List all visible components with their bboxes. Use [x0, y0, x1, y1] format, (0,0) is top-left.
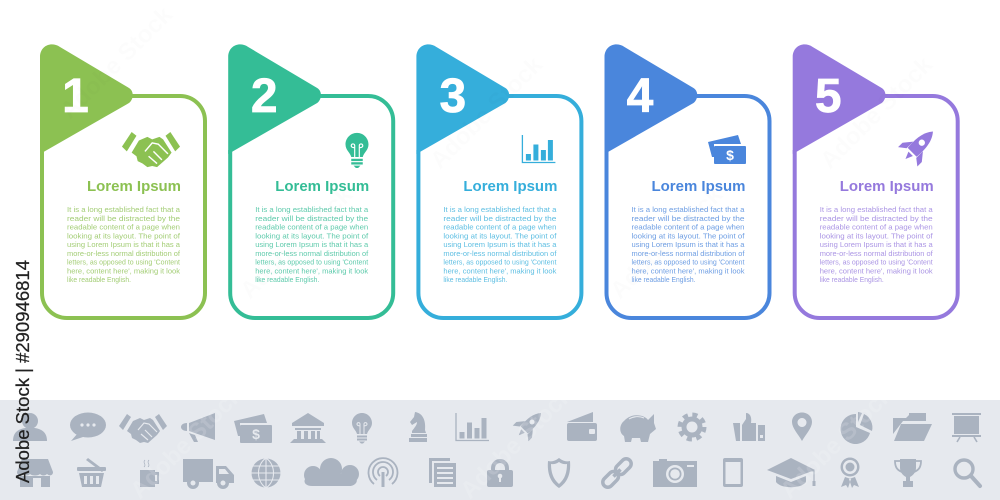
body text 3: here, content here', making it look — [443, 266, 557, 275]
body text 2: using Lorem Ipsum is that it has a — [255, 240, 369, 249]
body text 2: like readable English. — [255, 275, 319, 284]
icon: banknotes — [708, 135, 746, 164]
card outline 5 — [795, 96, 958, 318]
body text 1: here, content here', making it look — [67, 266, 180, 275]
body text 4: here, content here', making it look — [632, 266, 745, 275]
icon: person — [13, 413, 47, 441]
triangle badge 2 — [228, 44, 321, 154]
icon: banknotes — [234, 414, 272, 443]
body text 3: It is a long established fact that a — [443, 205, 557, 214]
body text 1: looking at its layout. The point of — [67, 231, 181, 240]
watermark: Adobe Stock — [235, 181, 358, 304]
icon: bank — [290, 413, 326, 443]
icon: megaphone — [181, 413, 215, 442]
body text 2 — [255, 205, 369, 284]
number 4: 4 — [627, 70, 654, 123]
body text 5: letters, as opposed to using 'Content — [820, 258, 933, 266]
icon: coffee cup — [140, 460, 159, 487]
watermark: Adobe Stock — [815, 51, 938, 174]
body text 3: looking at its layout. The point of — [443, 231, 557, 240]
body text 1: letters, as opposed to using 'Content — [67, 258, 180, 266]
card outline 2 — [230, 96, 393, 318]
body text 5: looking at its layout. The point of — [820, 231, 934, 240]
body text 4: It is a long established fact that a — [632, 205, 745, 214]
icon: documents — [429, 458, 456, 487]
number 1: 1 — [62, 70, 89, 123]
number 5: 5 — [815, 70, 842, 123]
icon: presentation board — [952, 413, 981, 442]
card outline 4 — [606, 96, 770, 318]
body text 4: letters, as opposed to using 'Content — [632, 258, 744, 266]
body text 1 — [67, 205, 181, 284]
icon: padlock — [487, 459, 513, 487]
body text 5: It is a long established fact that a — [820, 205, 934, 214]
triangle badge 1 — [40, 44, 133, 154]
body text 2: letters, as opposed to using 'Content — [255, 258, 368, 266]
body text 4: looking at its layout. The point of — [632, 231, 746, 240]
body text 4: like readable English. — [632, 275, 696, 284]
icon: graduation cap — [767, 458, 816, 487]
body text 4 — [632, 205, 746, 284]
icon: camera — [653, 459, 697, 487]
body text 3: like readable English. — [443, 275, 507, 284]
body text 2: It is a long established fact that a — [255, 205, 369, 214]
card outline 1 — [42, 96, 205, 318]
heading 2: Lorem Ipsum — [275, 179, 369, 195]
icon: handshake — [122, 132, 180, 167]
panel: step 1 — [40, 44, 205, 318]
icon: cloud — [304, 458, 359, 486]
body text 5: using Lorem Ipsum is that it has a — [820, 240, 934, 249]
body text 5: more-or-less normal distribution of — [820, 249, 934, 258]
panel: step 2 — [228, 44, 393, 318]
body text 2: looking at its layout. The point of — [255, 231, 369, 240]
icon: magnifier — [955, 460, 980, 486]
icon: award rosette — [840, 458, 860, 488]
body text 1: readable content of a page when — [67, 222, 180, 232]
body text 1: more-or-less normal distribution of — [67, 249, 181, 258]
body text 3 — [443, 205, 557, 284]
card outline 3 — [418, 96, 581, 318]
icon: light bulb — [346, 133, 368, 168]
icon: delivery truck — [183, 459, 234, 489]
icon: smartphone — [723, 458, 743, 487]
icon: bar chart — [522, 135, 555, 162]
body text 2: here, content here', making it look — [255, 266, 369, 275]
body text 2: reader will be distracted by the — [255, 214, 368, 223]
icon: handshake — [119, 414, 167, 443]
body text 4: more-or-less normal distribution of — [632, 249, 745, 258]
panel: step 3 — [416, 44, 581, 318]
watermark: Adobe Stock — [605, 181, 728, 304]
icon: shop — [17, 459, 53, 487]
icon: light bulb — [352, 413, 372, 444]
body text 1: It is a long established fact that a — [67, 205, 181, 214]
body text 1: like readable English. — [67, 275, 131, 284]
icon: wallet — [567, 412, 597, 441]
triangle badge 5 — [793, 44, 885, 154]
heading 5: Lorem Ipsum — [840, 179, 934, 195]
icon: chess knight — [409, 412, 427, 442]
watermark: Adobe Stock — [425, 51, 548, 174]
icon strip: all icons — [13, 405, 981, 489]
body text 4: using Lorem Ipsum is that it has a — [632, 240, 745, 249]
icon: speech bubble — [70, 412, 106, 441]
heading 3: Lorem Ipsum — [463, 179, 557, 195]
icon: gear — [680, 415, 704, 439]
heading 1: Lorem Ipsum — [87, 179, 181, 195]
heading 4: Lorem Ipsum — [652, 179, 746, 195]
body text 1: using Lorem Ipsum is that it has a — [67, 240, 181, 249]
body text 3: using Lorem Ipsum is that it has a — [443, 240, 557, 249]
triangle badge 4 — [604, 44, 697, 154]
icon: bar chart — [456, 413, 489, 440]
stock id vertical text: Adobe Stock | #290946814 — [13, 260, 33, 483]
icon: broadcast signal — [368, 458, 398, 487]
body text 5: here, content here', making it look — [820, 266, 933, 275]
icon: trophy — [895, 459, 921, 487]
body text 4: readable content of a page when — [632, 222, 744, 232]
icon: chain link — [601, 457, 633, 489]
body text 2: readable content of a page when — [255, 222, 368, 232]
panel: step 4 — [604, 44, 770, 318]
icon: map pin — [792, 412, 812, 441]
icon: rocket — [511, 405, 549, 443]
icon: pie chart — [841, 412, 872, 444]
triangle badge 3 — [416, 44, 509, 154]
icon: globe — [251, 458, 281, 488]
icon: thumbs up — [733, 413, 765, 441]
watermark: Adobe Stock — [55, 1, 178, 124]
body text 1: reader will be distracted by the — [67, 214, 180, 223]
body text 5: reader will be distracted by the — [820, 214, 933, 223]
icon: rocket — [896, 122, 943, 169]
body text 5: like readable English. — [820, 275, 884, 284]
body text 5: readable content of a page when — [820, 222, 933, 232]
icon: open folder — [893, 413, 932, 441]
body text 2: more-or-less normal distribution of — [255, 249, 369, 258]
body text 3: reader will be distracted by the — [443, 214, 556, 223]
panel: step 5 — [793, 44, 958, 318]
band: icon strip — [0, 400, 1000, 500]
icon: shield — [548, 458, 570, 488]
number 3: 3 — [440, 70, 466, 123]
number 2: 2 — [251, 70, 278, 123]
body text 3: letters, as opposed to using 'Content — [443, 258, 556, 266]
icon: shopping basket — [77, 458, 106, 487]
icon: piggy bank — [620, 414, 656, 442]
body text 3: more-or-less normal distribution of — [443, 249, 557, 258]
body text 4: reader will be distracted by the — [632, 214, 744, 223]
body text 3: readable content of a page when — [443, 222, 556, 232]
body text 5 — [820, 205, 934, 284]
